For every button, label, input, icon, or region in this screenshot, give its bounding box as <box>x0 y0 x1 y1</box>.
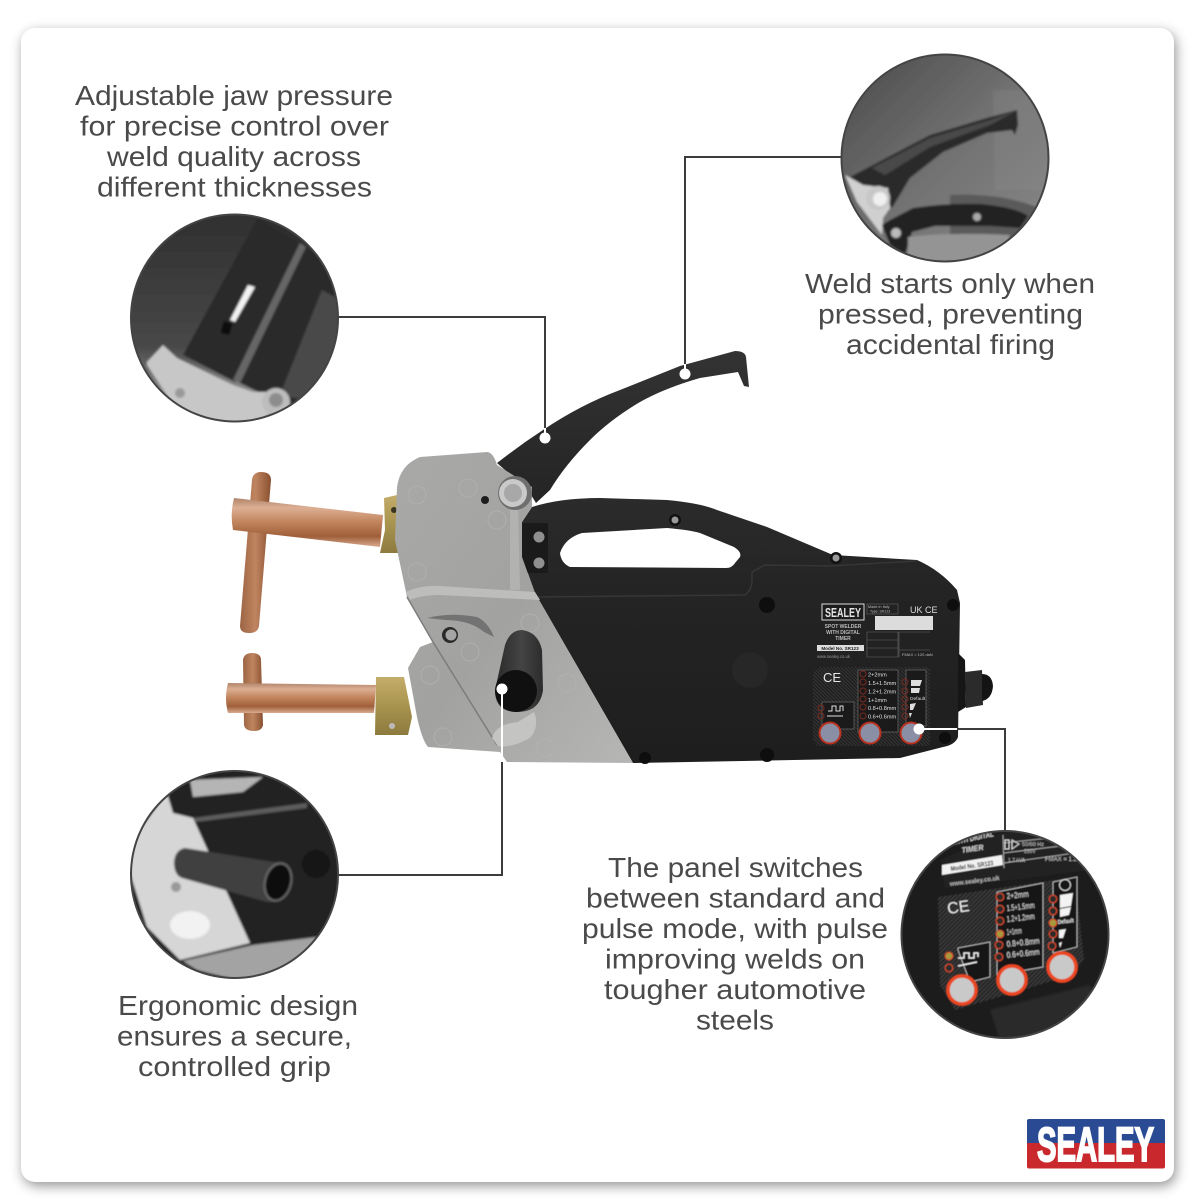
lever handle <box>497 351 749 503</box>
rating label: Type: SR123 <box>870 610 890 614</box>
brass clamps <box>375 495 412 735</box>
rating label: WITH DIGITAL <box>826 630 860 636</box>
control panel: 1+1mm <box>868 698 887 704</box>
callout line: grip <box>338 684 508 875</box>
control panel: 1.2+1.2mm <box>868 690 896 696</box>
detail circle: control panel: 1+1mm <box>1006 925 1022 937</box>
detail circle: control panel: CE <box>946 898 971 918</box>
text: trigger <box>805 268 1095 360</box>
detail circle: control panel: Model No. SR123 <box>950 860 994 873</box>
text: jaw pressure: for precise control over <box>80 110 389 142</box>
cable gland <box>958 653 993 712</box>
rating label: Made in Italy <box>868 605 890 609</box>
screw recesses and dome <box>639 597 959 764</box>
rubber grip knob <box>495 630 543 712</box>
detail circle: control panel: WITH DIGITAL <box>952 829 995 847</box>
text: trigger: Weld starts only when <box>805 268 1095 299</box>
lower copper electrode <box>226 653 376 731</box>
text: panel modes <box>582 852 888 1036</box>
bolts on handle <box>522 514 842 573</box>
text: panel modes: improving welds on <box>605 944 865 974</box>
detail circle: ergonomic grip <box>125 765 345 985</box>
rating label: SEALEY <box>825 605 861 620</box>
pivot bolt <box>498 476 532 510</box>
control panel: 0.8+0.8mm <box>868 706 896 712</box>
control panel <box>813 667 930 746</box>
control panel: 0.6+0.6mm <box>868 714 896 720</box>
rating label: www.sealey.co.uk <box>817 654 851 659</box>
upper copper electrode <box>232 472 383 633</box>
text: ergonomic grip: Ergonomic design <box>118 990 358 1021</box>
detail circle: control panel: 2+2mm <box>1006 889 1029 901</box>
detail circle: jaw pressure adjuster <box>125 210 345 430</box>
text: ergonomic grip: ensures a secure, <box>117 1020 352 1052</box>
rating label: TIMER <box>835 636 851 642</box>
text: panel modes: steels <box>696 1004 774 1036</box>
control panel: 2+2mm <box>868 672 887 678</box>
text: panel modes: The panel switches <box>608 852 863 883</box>
detail circle: control panel: 1.7 kVA <box>1008 858 1026 864</box>
control panel: Default <box>910 696 926 702</box>
detail circle: control panel: TIMER <box>961 843 984 855</box>
detail circle: control panel: 230V <box>1024 849 1036 855</box>
rating label: SPOT WELDER <box>825 624 862 630</box>
body seam highlight <box>536 561 917 597</box>
text: panel modes: tougher automotive <box>604 974 866 1005</box>
rating label <box>817 601 938 660</box>
text: jaw pressure: weld quality across <box>106 141 361 172</box>
text: panel modes: pulse mode, with pulse <box>582 913 888 944</box>
product: spot welder <box>226 351 993 764</box>
detail circle: control panel: Default <box>1058 918 1074 926</box>
rating label: Model No. SR123 <box>821 646 859 651</box>
text: ergonomic grip: controlled grip <box>138 1051 331 1082</box>
black body with carry handle <box>522 498 960 763</box>
detail circle: control panel: 0.8+0.8mm <box>1006 936 1040 949</box>
detail circle: control panel: 0.6+0.6mm <box>1006 947 1040 960</box>
detail circle: control panel: 1.2+1.2mm <box>1006 911 1035 924</box>
silver casting <box>395 452 633 763</box>
text: jaw pressure <box>75 80 393 202</box>
rating label: FMAX = 120 daN <box>902 652 933 657</box>
detail circle: control panel: 50/60 Hz <box>1022 842 1044 848</box>
detail circle: safety trigger <box>835 50 1055 270</box>
detail circle: control panel: FMAX = 1.2 <box>1045 857 1078 863</box>
rating label: UK CE <box>910 605 938 615</box>
text: panel modes: between standard and <box>586 882 885 914</box>
callout line: trigger <box>680 157 841 380</box>
text: ergonomic grip <box>117 990 358 1082</box>
text: trigger: accidental firing <box>846 329 1055 360</box>
control panel: 1.5+1.5mm <box>868 681 896 687</box>
callout line: jaw pressure <box>338 317 550 444</box>
detail circle: control panel <box>895 825 1115 1045</box>
callout line: panel <box>914 724 1005 831</box>
text: jaw pressure: Adjustable jaw pressure <box>75 80 393 111</box>
detail circle: control panel: www.sealey.co.uk <box>948 875 1000 888</box>
text: trigger: pressed, preventing <box>818 298 1083 330</box>
detail circle: control panel: 1.5+1.5mm <box>1006 900 1035 913</box>
text: jaw pressure: different thicknesses <box>97 172 372 202</box>
control panel: CE <box>823 670 841 685</box>
